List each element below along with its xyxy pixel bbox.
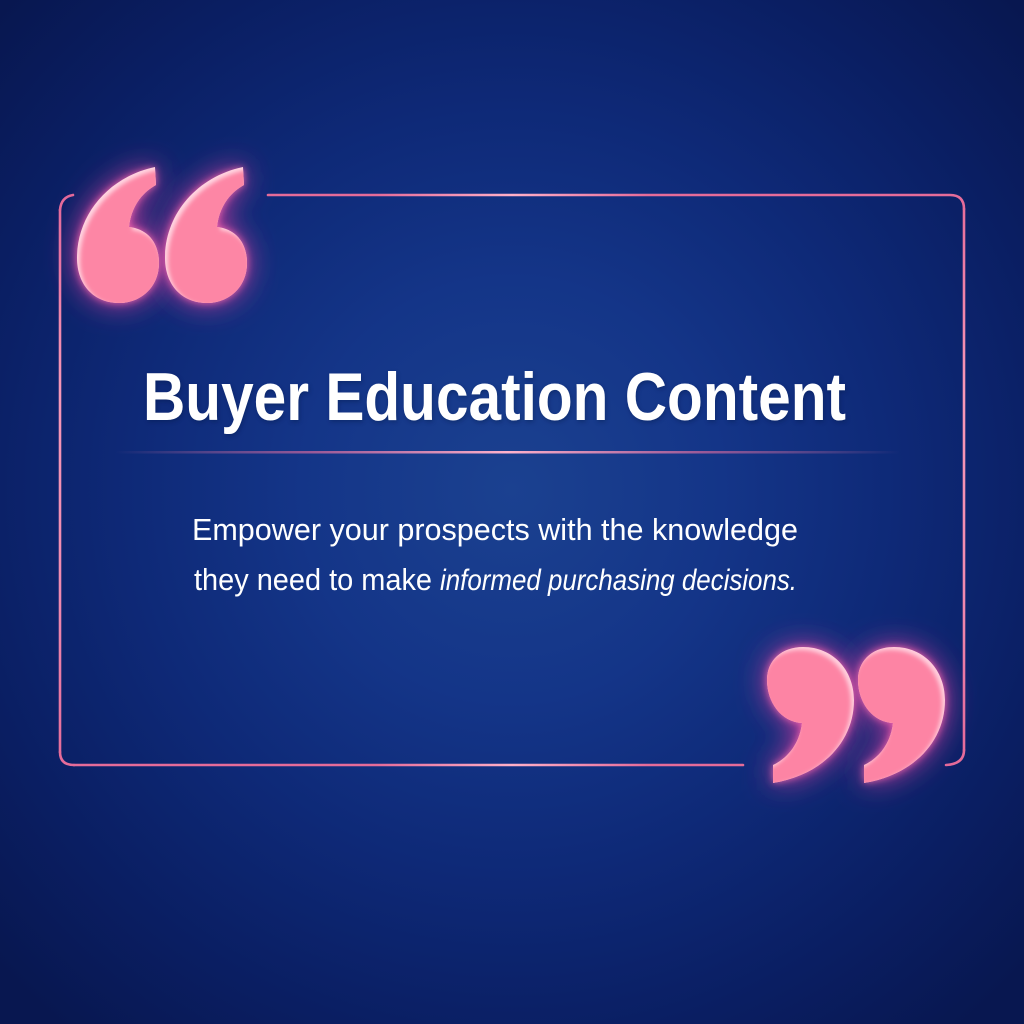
subtitle bbox=[192, 512, 798, 597]
subtitle line 2 bbox=[194, 562, 797, 597]
right mark bbox=[165, 167, 247, 303]
subtitle line 2: informed purchasing decisions. bbox=[440, 564, 797, 597]
subtitle line 1: Empower your prospects with the knowledge bbox=[192, 512, 798, 547]
quote frame bbox=[60, 195, 964, 765]
subtitle line 2: they need to make bbox=[194, 562, 432, 597]
left mark bbox=[77, 167, 159, 303]
left mark bbox=[767, 647, 854, 783]
icon: closing quotation mark bbox=[760, 640, 951, 790]
icon: opening quotation mark bbox=[70, 160, 253, 310]
title divider bbox=[115, 451, 900, 454]
title: Buyer Education Content bbox=[143, 359, 846, 435]
right mark bbox=[858, 647, 945, 783]
title: Buyer Education Content bbox=[144, 361, 847, 437]
